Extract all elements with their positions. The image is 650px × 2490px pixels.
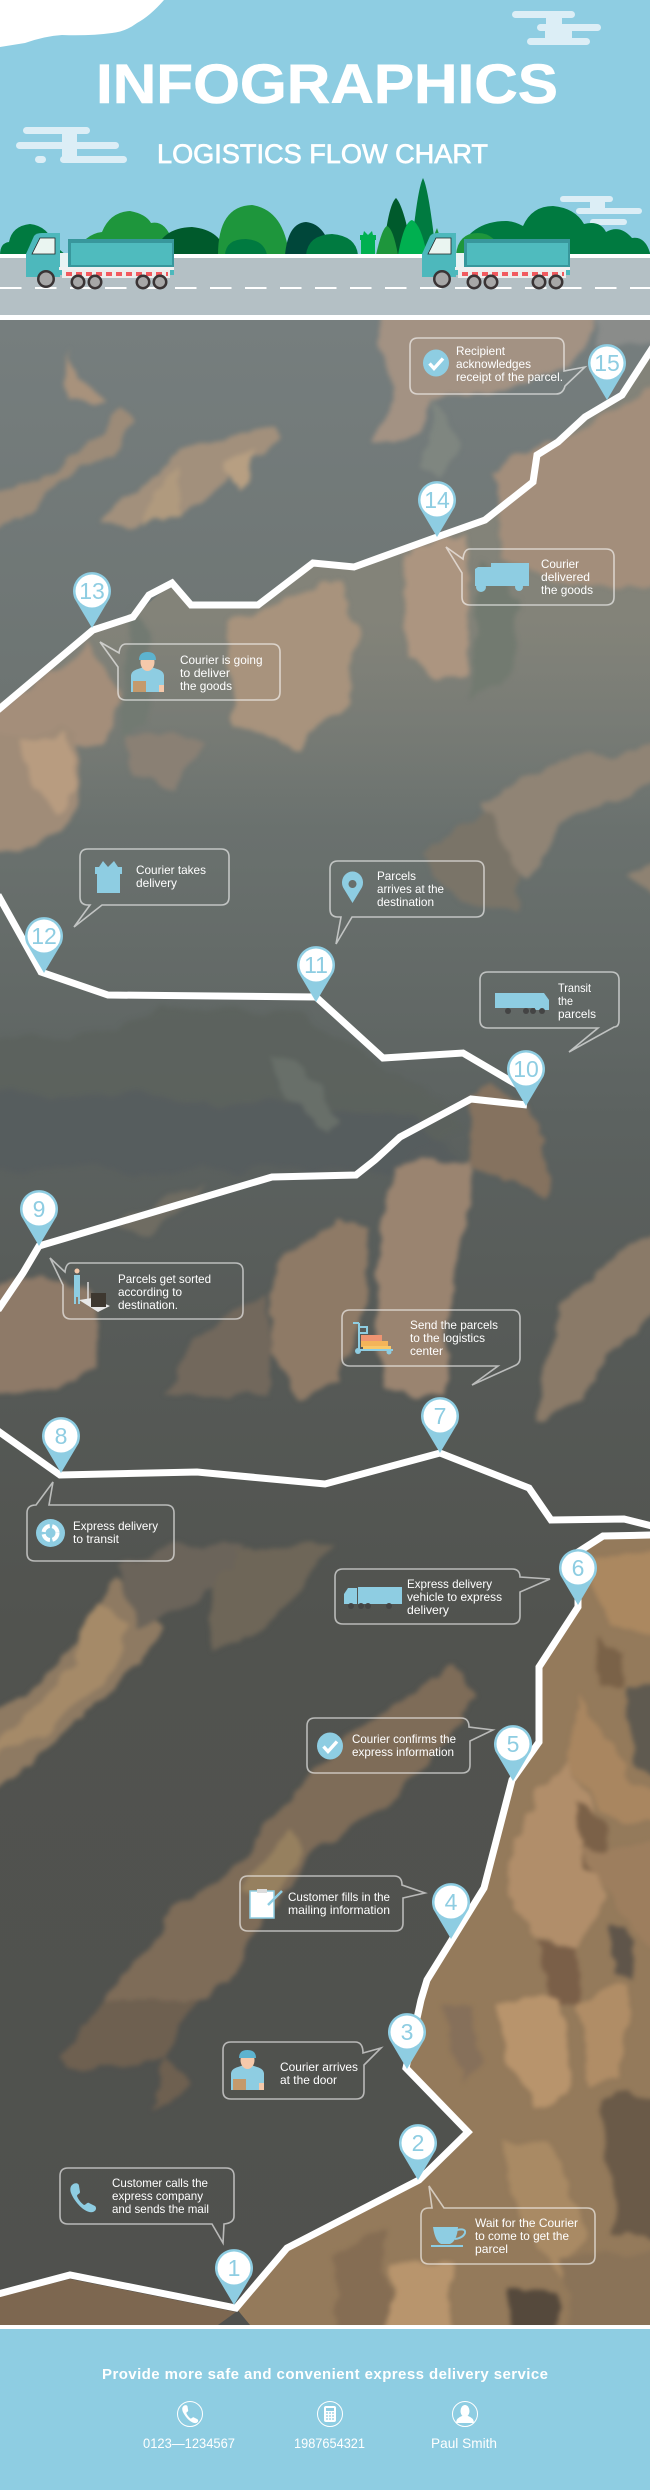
step 14: delivered: [541, 570, 590, 584]
subtitle: LOGISTICS FLOW CHART: [157, 139, 488, 169]
icon: delivery truck: [475, 563, 529, 592]
truck: left: [26, 233, 174, 290]
truck: right: [422, 233, 570, 290]
step 4: mailing information: [288, 1903, 390, 1917]
trees and bushes: [0, 178, 650, 255]
step 6: Express delivery: [407, 1577, 492, 1591]
lower right mountain streaks: [330, 1545, 650, 2345]
pin 10: [507, 1050, 545, 1106]
step 15: receipt of the parcel.: [456, 370, 563, 384]
step 3: [223, 2042, 381, 2099]
pin 1: [215, 2249, 253, 2305]
pin 12: 12: [31, 923, 57, 949]
contact: phone: [143, 2402, 235, 2451]
step 10: Transit: [558, 981, 592, 995]
step 8: to transit: [73, 1532, 120, 1546]
step 14: Courier: [541, 557, 579, 571]
pin 15: [588, 344, 626, 400]
step 13: Courier is going: [180, 653, 262, 667]
step 8: Express delivery: [73, 1519, 158, 1533]
lower-mid ridges: [468, 1082, 545, 1200]
step 13: to deliver: [180, 666, 230, 680]
pin 9: [20, 1190, 58, 1246]
pin 6: 6: [572, 1555, 584, 1581]
step 11: destination: [377, 895, 434, 909]
icon: cup: [431, 2227, 465, 2247]
panel: header: [0, 0, 650, 320]
pin 4: [432, 1883, 470, 1939]
contact: person: [431, 2402, 497, 2451]
pin 7: 7: [434, 1403, 446, 1429]
contact: mobile: [294, 2402, 365, 2451]
step 13: [100, 642, 280, 700]
icon: delivery vehicle: [344, 1587, 402, 1609]
step 4: Customer fills in the: [288, 1890, 390, 1904]
pin 15: 15: [594, 350, 620, 376]
cloud: lower right: [560, 196, 642, 225]
step 7: to the logistics: [410, 1331, 485, 1345]
icon: phone: [70, 2183, 96, 2212]
title: INFOGRAPHICS: [96, 52, 558, 115]
pin 3: 3: [401, 2019, 413, 2045]
step 11: Parcels: [377, 869, 416, 883]
step 1: Customer calls the: [112, 2176, 208, 2190]
footer heading: Provide more safe and convenient express delivery service: [102, 2366, 548, 2383]
icon: courier: [131, 652, 164, 692]
step 12: Courier takes: [136, 863, 206, 877]
panel: footer: [0, 2325, 650, 2490]
step 9: Parcels get sorted: [118, 1272, 211, 1286]
contact: person: Paul Smith: [431, 2435, 497, 2451]
step 10: parcels: [558, 1007, 596, 1021]
pin 6: [559, 1549, 597, 1605]
icon: location pin: [342, 872, 363, 903]
step 9: [50, 1258, 243, 1319]
contact: phone: 0123—1234567: [143, 2435, 235, 2451]
route line: [0, 347, 650, 2308]
pin 1: 1: [228, 2255, 240, 2281]
icon: worker with trolley: [74, 1268, 110, 1312]
pin 2: 2: [412, 2130, 424, 2156]
icon: transit cycle: [36, 1519, 65, 1547]
pin 8: 8: [55, 1423, 67, 1449]
icon: parcel trolley: [353, 1323, 393, 1354]
step 1: [60, 2168, 234, 2243]
step 6: [335, 1569, 550, 1624]
step 4: [240, 1876, 425, 1931]
step 12: delivery: [136, 876, 177, 890]
step 13: the goods: [180, 679, 232, 693]
icon: clipboard: [250, 1889, 282, 1918]
pin 3: [388, 2013, 426, 2069]
step 1: and sends the mail: [112, 2202, 209, 2216]
pin 11: [297, 946, 335, 1002]
cloud: left: [16, 127, 127, 163]
step 12: [74, 849, 229, 927]
icon: check: [423, 350, 449, 376]
pin 14: [418, 481, 456, 537]
icon: transit truck: [495, 993, 549, 1014]
step 5: express information: [352, 1745, 454, 1759]
cloud: top right: [512, 11, 601, 45]
step 3: at the door: [280, 2073, 337, 2087]
step 3: Courier arrives: [280, 2060, 358, 2074]
road: [0, 254, 650, 320]
lower left ridges: [0, 1580, 166, 1800]
icon: check: [317, 1732, 343, 1760]
step 15: [410, 338, 585, 394]
upper slopes: [370, 320, 596, 444]
step 5: Courier confirms the: [352, 1732, 456, 1746]
step 7: [342, 1310, 520, 1385]
step 10: the: [558, 994, 573, 1008]
step 7: Send the parcels: [410, 1318, 498, 1332]
pin 4: 4: [445, 1889, 458, 1915]
contact: mobile: 1987654321: [294, 2435, 365, 2451]
step 6: delivery: [407, 1603, 449, 1617]
step 7: center: [410, 1344, 443, 1358]
step 5: [307, 1718, 493, 1773]
step 2: Wait for the Courier: [475, 2216, 578, 2230]
pin 14: 14: [424, 487, 450, 513]
middle slopes: [0, 730, 80, 850]
step 10: [480, 972, 619, 1052]
pin 13: [73, 572, 111, 628]
step 9: destination.: [118, 1298, 178, 1312]
step 11: [330, 861, 484, 944]
pin 5: [494, 1725, 532, 1781]
step 8: [27, 1482, 174, 1561]
step 15: acknowledges: [456, 357, 531, 371]
pin 9: 9: [33, 1196, 45, 1222]
step 11: arrives at the: [377, 882, 444, 896]
icon: gift: [95, 861, 122, 893]
step 1: express company: [112, 2189, 203, 2203]
step 14: [446, 547, 614, 605]
step 2: to come to get the: [475, 2229, 569, 2243]
step 2: [421, 2186, 595, 2264]
step 14: the goods: [541, 583, 593, 597]
step 6: vehicle to express: [407, 1590, 502, 1604]
pin 12: [25, 917, 63, 973]
pin 7: [421, 1397, 459, 1453]
icon: courier: [231, 2050, 264, 2090]
pin 13: 13: [79, 578, 105, 604]
pin 2: [399, 2124, 437, 2180]
pin 10: 10: [513, 1056, 539, 1082]
pin 5: 5: [507, 1731, 519, 1757]
step 9: according to: [118, 1285, 182, 1299]
pin 8: [42, 1417, 80, 1473]
step 2: parcel: [475, 2242, 508, 2256]
step 15: Recipient: [456, 344, 506, 358]
pin 11: 11: [304, 952, 328, 978]
